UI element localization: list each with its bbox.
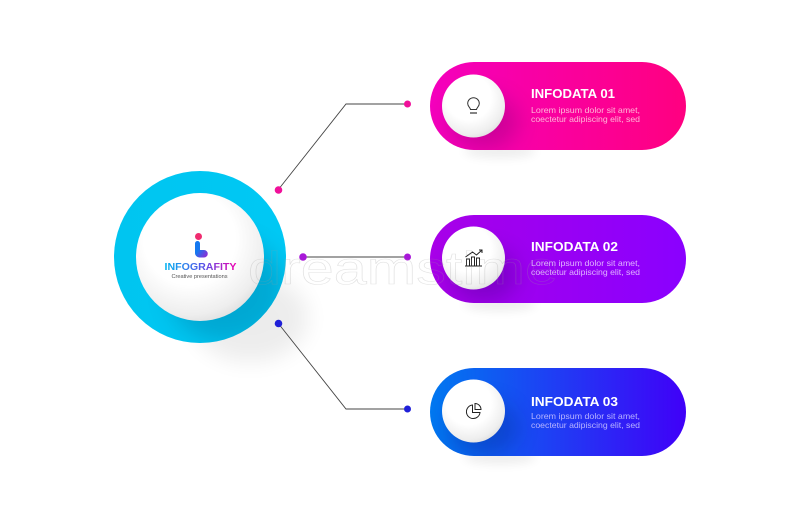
logo tagline: Creative presentations (172, 274, 228, 280)
heading: INFODATA 01 (531, 86, 615, 101)
ball with pie icon (442, 380, 505, 442)
connector: top (275, 100, 411, 194)
description (531, 105, 640, 124)
panel: infodata 01 (430, 62, 686, 158)
ball with bulb icon (442, 74, 505, 138)
connector: bottom (275, 320, 411, 412)
ball with chart icon (442, 226, 505, 290)
logo wordmark: INFOGRAFITY (164, 261, 236, 273)
description (531, 258, 640, 277)
panel: infodata 02 (430, 215, 686, 311)
description: coectetur adipiscing elit, sed (531, 267, 640, 277)
connector: middle (299, 253, 411, 261)
infographic (114, 62, 686, 464)
panel: infodata 03 (430, 368, 686, 464)
description: Lorem ipsum dolor sit amet, (531, 258, 640, 268)
heading: INFODATA 03 (531, 394, 618, 409)
description: coectetur adipiscing elit, sed (531, 420, 640, 430)
description: Lorem ipsum dolor sit amet, (531, 411, 640, 421)
watermark: dreamstime (248, 242, 558, 294)
description: coectetur adipiscing elit, sed (531, 114, 640, 124)
central circle (114, 171, 308, 362)
description: Lorem ipsum dolor sit amet, (531, 105, 640, 115)
logo icon (195, 233, 208, 258)
heading: INFODATA 02 (531, 239, 618, 254)
description (531, 411, 640, 430)
